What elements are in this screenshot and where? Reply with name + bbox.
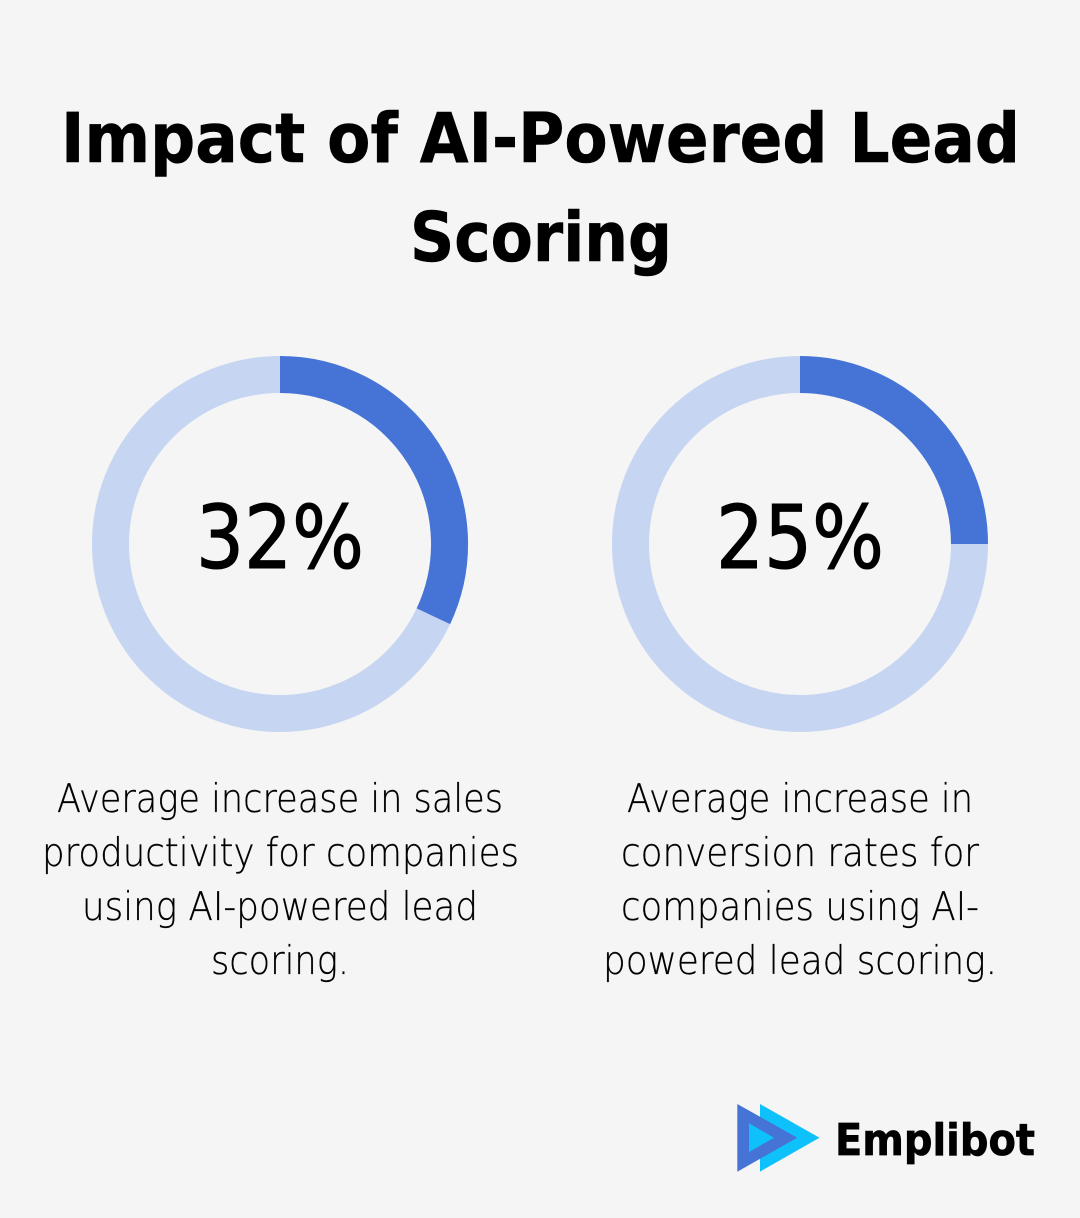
description: sales productivity: using AI-powered lead [82,885,478,930]
value: 25%: 25% [716,487,884,589]
title: Impact of AI-Powered Lead [61,99,1020,179]
value: 32%: 32% [196,487,364,589]
title [61,99,1020,278]
panel: sales productivity [42,374,519,984]
donut chart: 32% [110,374,450,714]
description: conversion rates: companies using AI- [621,885,979,930]
icon: play triangles [737,1104,820,1172]
description: conversion rates: powered lead scoring. [603,939,997,984]
wordmark: Emplibot [835,1115,1035,1166]
description: conversion rates [603,777,997,984]
logo: Emplibot [737,1104,1035,1172]
donut chart: 25% [630,374,970,714]
description: sales productivity [42,777,519,984]
description: sales productivity: scoring. [211,939,349,984]
panel: conversion rates [603,374,997,984]
description: conversion rates: Average increase in [627,777,973,822]
title: Scoring [410,198,672,278]
description: sales productivity: productivity for companies [42,831,519,876]
description: conversion rates: conversion rates for [621,831,979,876]
description: sales productivity: Average increase in sales [57,777,503,822]
